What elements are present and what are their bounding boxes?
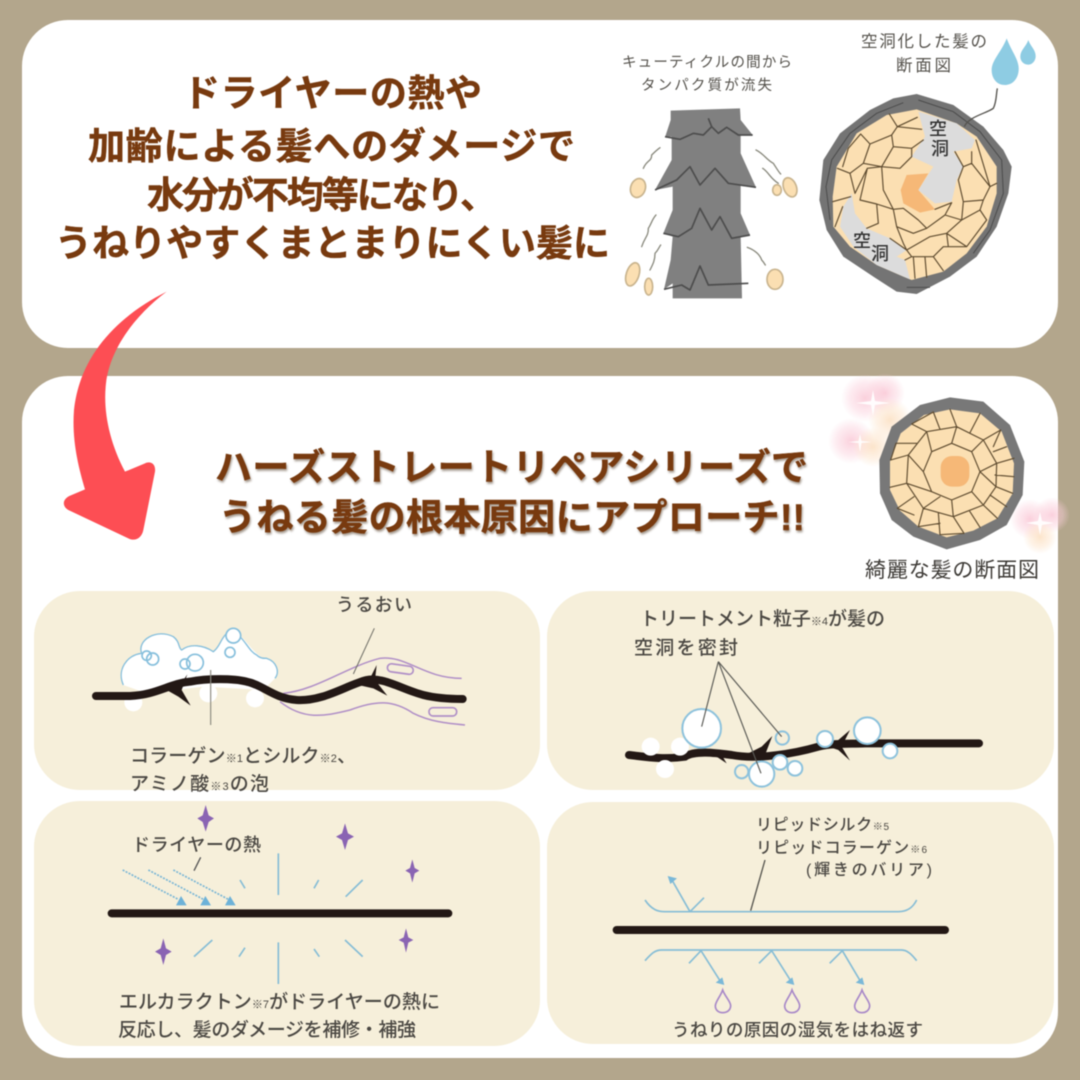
- labels: hollow spots: 空: [929, 119, 947, 139]
- heading: damage cause: 水分が不均等になり、: [147, 175, 497, 216]
- label: treatment particles: トリートメント粒子※4が髪の: [640, 608, 885, 630]
- caption: hollow cross section: 断面図: [896, 56, 951, 75]
- caption: protein loss: キューティクルの間から: [622, 54, 792, 71]
- heading: solution: うねる髪の根本原因にアプローチ!!: [219, 497, 805, 538]
- label: lipid barrier: (輝きのバリア): [806, 861, 932, 879]
- label: treatment particles: 空洞を密封: [634, 637, 738, 659]
- caption: protein loss: [622, 54, 792, 94]
- illustration: healthy hair cross section: [879, 397, 1024, 549]
- label: foam ingredients: [130, 745, 356, 795]
- label: elukalactone repair: [118, 991, 440, 1041]
- panel: moisture foam: [34, 591, 540, 795]
- heading: solution: ハーズストレートリペアシリーズで: [215, 447, 808, 488]
- illustration: hollow hair cross section: [819, 38, 1036, 294]
- label: dryer heat: ドライヤーの熱: [132, 835, 261, 855]
- illustration: particles sealing hair: [629, 662, 979, 787]
- label: treatment particles: [634, 608, 885, 659]
- illustration: damaged cuticle hair shaft: [623, 108, 800, 298]
- caption: protein loss: タンパク質が流失: [641, 76, 772, 94]
- heading: solution: [215, 447, 808, 538]
- arrow: red curved down arrow: [64, 292, 167, 540]
- labels: hollow spots: 洞: [931, 139, 949, 159]
- panel: treatment particles: [547, 591, 1054, 790]
- caption: hollow cross section: 空洞化した髪の: [861, 32, 987, 51]
- labels: hollow spots: [853, 119, 949, 264]
- caption: healthy cross section: 綺麗な髪の断面図: [865, 559, 1039, 582]
- illustration: foam on hair: [96, 628, 465, 725]
- label: foam ingredients: アミノ酸※3の泡: [130, 773, 269, 795]
- panel: solution: [22, 292, 1070, 1058]
- label: moisture: うるおい: [336, 595, 412, 615]
- label: lipid barrier: リピッドコラーゲン※6: [756, 839, 927, 857]
- sparkles: [828, 373, 1070, 554]
- label: elukalactone repair: 反応し、髪のダメージを補修・補強: [118, 1019, 416, 1041]
- panel: dryer heat repair: [34, 801, 540, 1046]
- caption: hollow cross section: [861, 32, 987, 75]
- heading: damage cause: ドライヤーの熱や: [183, 73, 482, 114]
- heading: damage cause: [55, 73, 610, 264]
- illustration: heat reaction: [112, 805, 448, 984]
- label: lipid barrier: [756, 816, 932, 879]
- illustration: barrier and humidity: [617, 860, 945, 1013]
- panel: lipid barrier: [547, 802, 1054, 1044]
- label: elukalactone repair: エルカラクトン※7がドライヤーの熱に: [119, 991, 440, 1013]
- label: repel humidity: うねりの原因の湿気をはね返す: [672, 1020, 923, 1040]
- heading: damage cause: 加齢による髪へのダメージで: [88, 126, 575, 167]
- label: foam ingredients: コラーゲン※1とシルク※2、: [130, 745, 356, 767]
- labels: hollow spots: 洞: [871, 244, 889, 264]
- labels: hollow spots: 空: [853, 231, 871, 251]
- label: lipid barrier: リピッドシルク※5: [756, 816, 889, 834]
- heading: damage cause: うねりやすくまとまりにくい髪に: [55, 223, 610, 264]
- panel: damage cause: [22, 20, 1058, 348]
